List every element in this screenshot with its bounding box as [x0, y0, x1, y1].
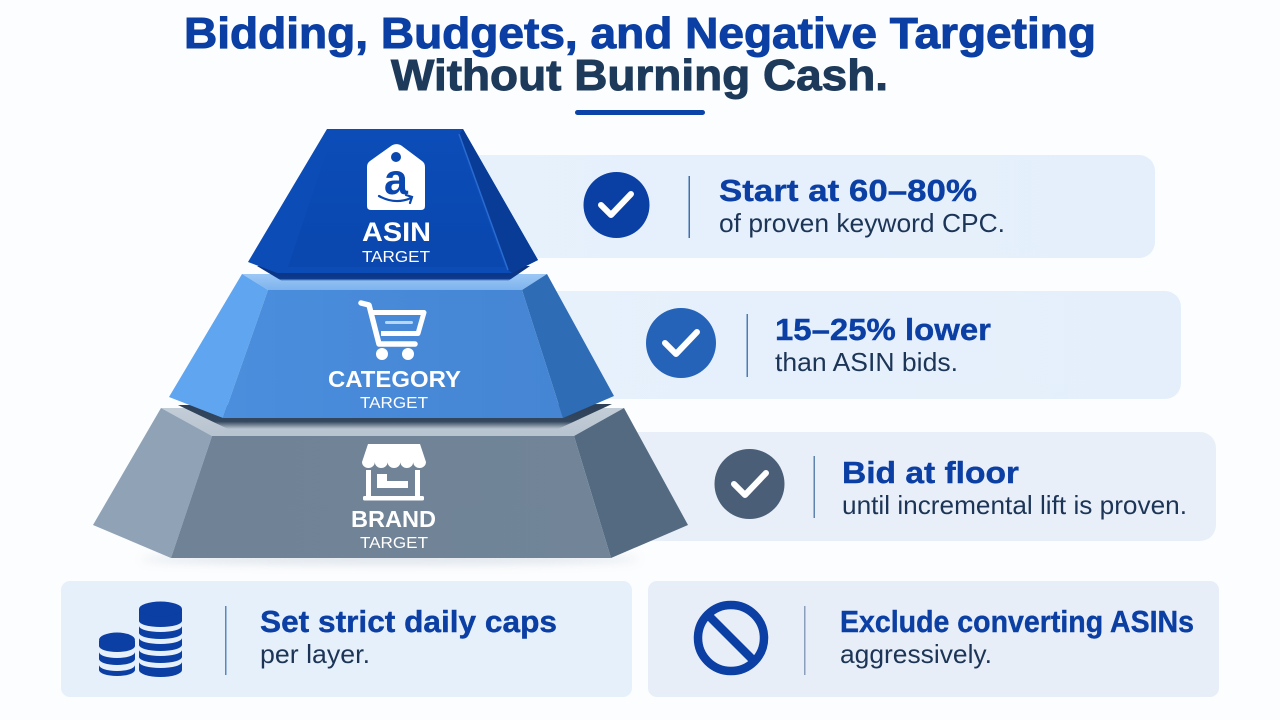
panel: Category bid advice	[520, 291, 1181, 399]
pyramid	[93, 129, 688, 564]
text: Brand bid: Bid at floor	[842, 455, 1019, 490]
icon: Amazon price tag	[367, 144, 425, 210]
tier: ASIN: ASIN	[362, 217, 431, 247]
panel: negative targeting	[648, 581, 1219, 697]
tier: Brand	[93, 404, 688, 558]
tier: ASIN	[248, 129, 538, 273]
icon: check badge	[646, 308, 716, 378]
text: negative targeting	[840, 604, 1194, 669]
text: daily caps: Set strict daily caps	[260, 604, 557, 639]
icon: Amazon price tag: a	[384, 156, 409, 204]
tier: ASIN: TARGET	[362, 249, 430, 266]
text: ASIN bid: of proven keyword CPC.	[719, 208, 1005, 238]
text: daily caps: per layer.	[260, 639, 370, 669]
text: Category bid: 15–25% lower	[775, 312, 991, 347]
panel: ASIN bid advice	[440, 155, 1155, 258]
icon: storefront	[362, 444, 426, 500]
tier: Brand: BRAND	[351, 506, 436, 532]
text: Brand bid	[842, 455, 1187, 520]
text: ASIN bid	[719, 173, 1005, 238]
icon: prohibited sign	[698, 605, 764, 671]
icon: check badge	[714, 449, 784, 519]
text: negative targeting: aggressively.	[840, 639, 992, 669]
icon: shopping cart	[361, 303, 424, 360]
icon: check badge	[584, 172, 650, 238]
tier: Category	[169, 266, 614, 418]
panel: daily caps	[61, 581, 632, 697]
title underline	[575, 110, 705, 115]
tier: Category: TARGET	[360, 395, 428, 412]
tier: Category: CATEGORY	[328, 366, 461, 392]
tier: Brand: TARGET	[360, 535, 428, 552]
text: Brand bid: until incremental lift is proven.	[842, 490, 1187, 520]
text: Category bid: than ASIN bids.	[775, 347, 958, 377]
text: daily caps	[260, 604, 557, 669]
text: ASIN bid: Start at 60–80%	[719, 173, 977, 208]
panel: Brand bid advice	[600, 432, 1216, 541]
title	[184, 9, 1096, 100]
icon: coin stacks	[99, 602, 182, 677]
title: Bidding, Budgets, and Negative Targeting	[184, 9, 1096, 58]
text: Category bid	[775, 312, 991, 377]
title: Without Burning Cash.	[391, 51, 888, 100]
text: negative targeting: Exclude converting ASINs	[840, 604, 1194, 639]
